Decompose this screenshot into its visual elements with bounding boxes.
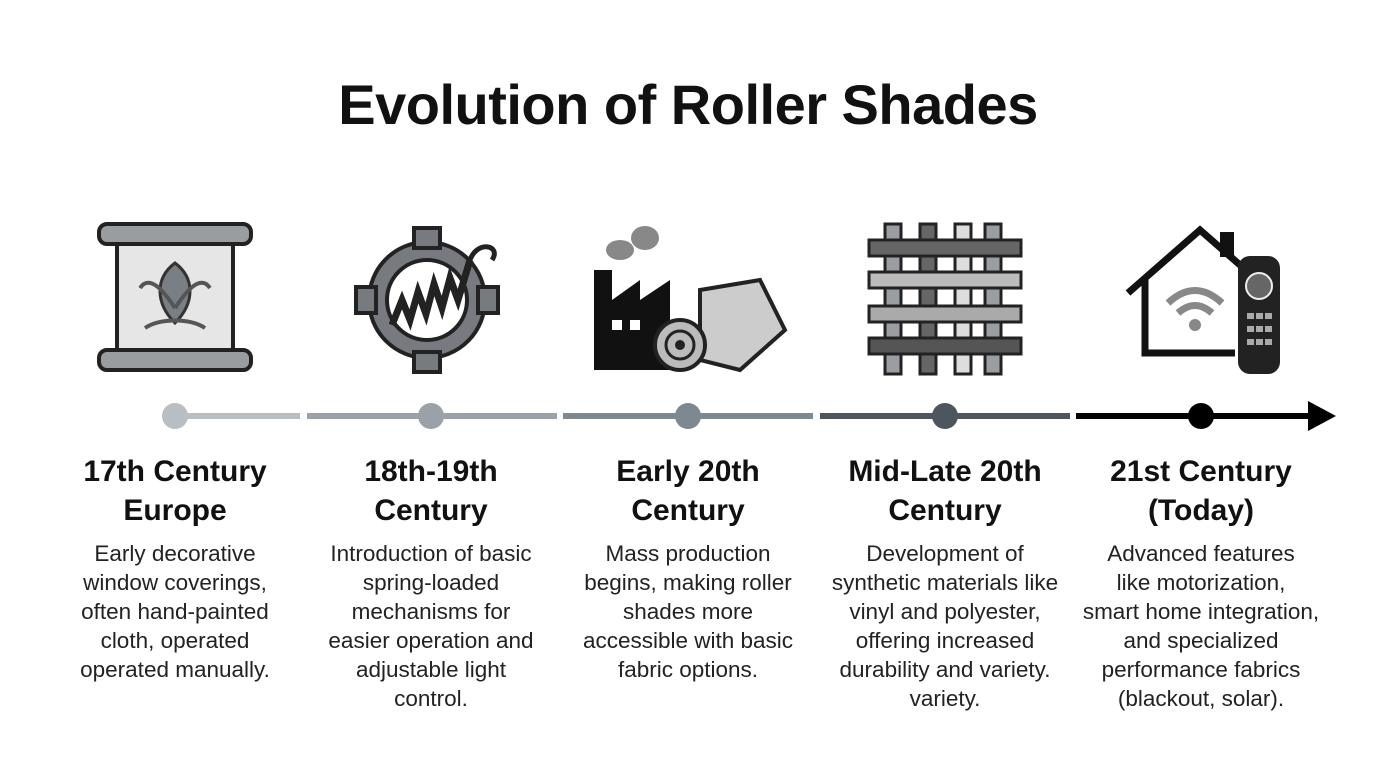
column: 18th-19th century: adjustable light	[356, 657, 506, 682]
column: early 20th century: shades more	[623, 599, 753, 624]
column: 18th-19th century: Century	[374, 494, 488, 527]
column: 18th-19th century	[328, 455, 534, 711]
icon: scroll	[97, 222, 253, 372]
column: 18th-19th century: 18th-19th	[364, 455, 498, 488]
column: 21st century: (blackout, solar).	[1118, 686, 1284, 711]
column: 21st century: (Today)	[1148, 494, 1254, 527]
column: 18th-19th century: easier operation and	[328, 628, 534, 653]
column: 18th-19th century: control.	[394, 686, 468, 711]
column: mid-late 20th century: variety.	[910, 686, 980, 711]
icon: smart home with remote	[1126, 225, 1280, 374]
column: mid-late 20th century: Mid-Late 20th	[848, 455, 1042, 488]
column: 18th-19th century: Introduction of basic	[330, 541, 532, 566]
column: mid-late 20th century: Century	[888, 494, 1002, 527]
column: mid-late 20th century: vinyl and polyester,	[849, 599, 1041, 624]
icon: gear with spring	[354, 226, 500, 374]
column: 18th-19th century: mechanisms for	[352, 599, 510, 624]
icon: woven fabric	[868, 222, 1022, 376]
column: 17th century	[80, 455, 270, 682]
column: early 20th century: begins, making roller	[584, 570, 792, 595]
column: 21st century: smart home integration,	[1083, 599, 1319, 624]
column: 21st century: like motorization,	[1117, 570, 1285, 595]
column: 18th-19th century: spring-loaded	[363, 570, 499, 595]
column: early 20th century: Early 20th	[616, 455, 760, 488]
column: 17th century: 17th Century	[83, 455, 267, 488]
column: 17th century: operated manually.	[80, 657, 270, 682]
column: 17th century: cloth, operated	[101, 628, 249, 653]
timeline	[162, 401, 1336, 431]
column: early 20th century: Century	[631, 494, 745, 527]
column: early 20th century: accessible with basic	[583, 628, 793, 653]
title: Evolution of Roller Shades	[338, 73, 1038, 136]
column: 17th century: often hand-painted	[81, 599, 269, 624]
column: 21st century: Advanced features	[1107, 541, 1295, 566]
column: mid-late 20th century: durability and variety.	[840, 657, 1050, 682]
column: 21st century: and specialized	[1123, 628, 1279, 653]
column: 21st century: 21st Century	[1110, 455, 1292, 488]
column: early 20th century: Mass production	[605, 541, 771, 566]
column: mid-late 20th century: Development of	[866, 541, 1024, 566]
column: 17th century: window coverings,	[83, 570, 267, 595]
column: early 20th century: fabric options.	[618, 657, 758, 682]
column: mid-late 20th century: offering increased	[856, 628, 1034, 653]
column: 17th century: Europe	[123, 494, 227, 527]
column: 21st century: performance fabrics	[1102, 657, 1300, 682]
icon: factory and fabric roll	[594, 226, 788, 372]
column: 17th century: Early decorative	[94, 541, 256, 566]
column: 21st century	[1083, 455, 1319, 711]
column: mid-late 20th century	[832, 455, 1058, 711]
column: mid-late 20th century: synthetic materials like	[832, 570, 1058, 595]
column: early 20th century	[583, 455, 793, 682]
